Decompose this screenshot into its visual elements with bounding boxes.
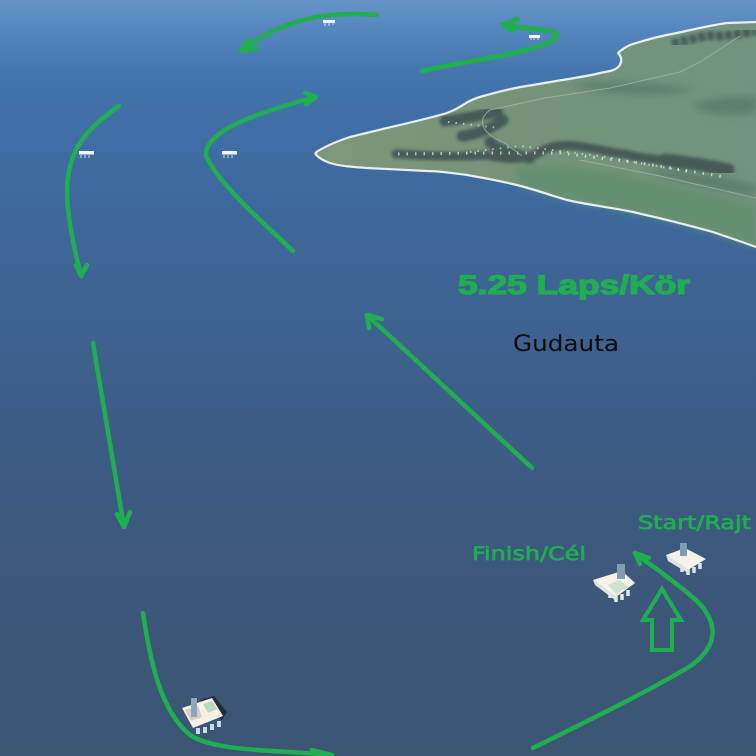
village: main strip — [396, 112, 728, 170]
arrow: inner upper turn — [206, 93, 316, 251]
village: north east — [672, 31, 756, 44]
arrow: start direction outline — [643, 589, 681, 650]
label: start: Start/Rajt — [638, 512, 751, 534]
platform: tiny left — [79, 151, 94, 158]
title: laps: 5.25 Laps/Kör — [458, 270, 691, 300]
label: location: Gudauta — [513, 332, 619, 357]
arrow: top left turn — [241, 14, 377, 51]
platform: bottom left — [182, 696, 227, 734]
peninsula — [315, 22, 756, 247]
arrow: left straight — [93, 343, 130, 527]
platform: tiny top right — [529, 35, 540, 40]
arrow: left upper turn — [67, 106, 119, 276]
platform: tiny centre — [222, 151, 237, 158]
label: finish: Finish/Cél — [472, 543, 586, 565]
platform: tiny top centre — [323, 20, 335, 26]
platform: start — [666, 543, 706, 575]
arrow: bottom left turn — [143, 613, 332, 755]
arrow: top right turn — [422, 19, 557, 71]
arrow: diagonal back straight — [367, 315, 532, 468]
platform: finish — [593, 564, 635, 602]
arrow: final turn to finish — [533, 553, 713, 748]
